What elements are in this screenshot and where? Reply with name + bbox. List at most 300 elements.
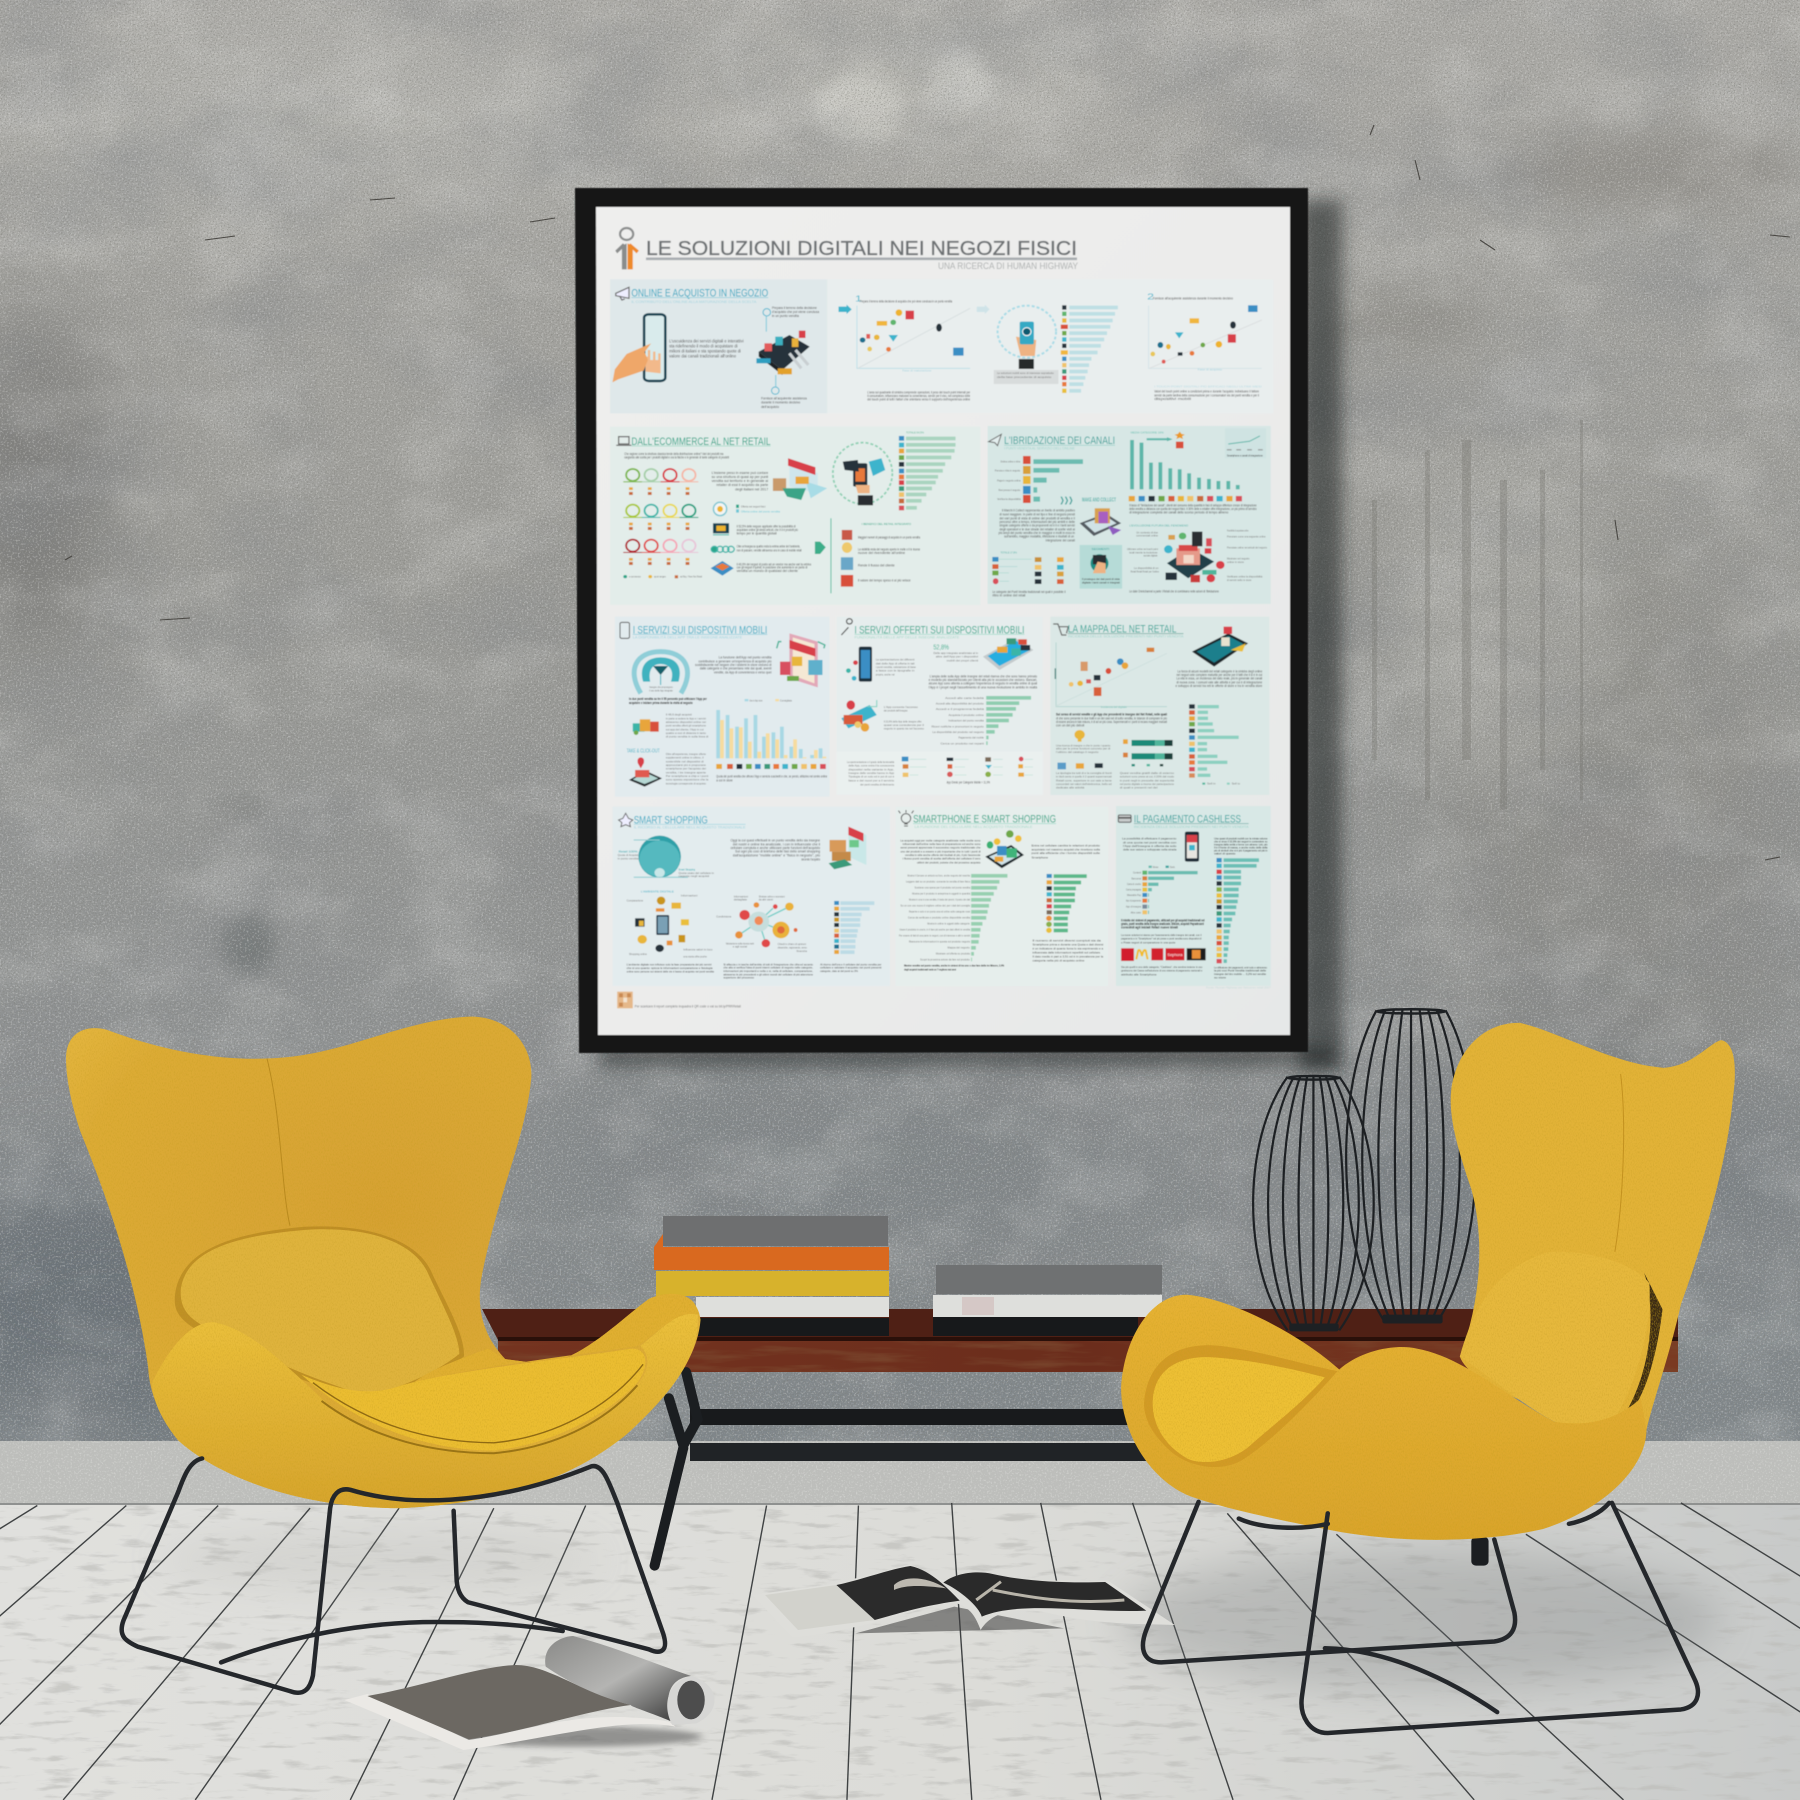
chart: scatter 1: L'area sul quadrante di sinistra comprende operazioni, il peso dei touch point interrati per: [867, 390, 970, 394]
text: pagamento right: Una quasi di prodotti mobili con la mirata volume: [1214, 837, 1267, 840]
illustration: social network: dinamiche, ragionando, verso: [778, 946, 807, 949]
text: smartphone bottom right: Il numero di servizi diversi compiuti sia da: [1032, 939, 1102, 942]
text: cashless bottom: su store: [1214, 976, 1226, 979]
bar chart: funzionalità: Pagamento dal mobile: [958, 736, 984, 739]
bar chart: funzionalità: Accedi alle carte fedeltà: [945, 697, 985, 700]
net retail indicators: acquistare online gli stessi articoli, che il vi è prodotti più: [737, 528, 798, 532]
icon: key/wrench: [841, 619, 852, 635]
heading and icon: take and click-out: TAKE & CLICK-OUT: [627, 748, 660, 754]
illustration: evoluzione del fenomeno: Retail Retail Retail per l'online: [1131, 570, 1159, 573]
text: smartphone right: punti alla efficiente che i fornire disponibili sulle: [1032, 852, 1100, 855]
list: benefici: Rende il flusso del cliente: [858, 563, 895, 567]
bold text: [904, 964, 1005, 971]
text: smartphone intro: utilizzi dei prodotti, potrete che dei prossimo acquisto: [917, 861, 981, 864]
illustration: evoluzione del fenomeno: sociale digitale: [1143, 554, 1158, 557]
text: smartphone bottom right: Smartphone prima e durante una Quota e dati diversi: [1032, 943, 1103, 946]
text: pagamento: di una quota nei punti vendita con: [1123, 841, 1176, 844]
sub-panel: app per categoria: fasce e del nuovi per a il servizio: [848, 779, 894, 782]
text: smartphone bottom right: categoria nella più di acquisto online: [1032, 959, 1084, 962]
illustration: evoluzione del fenomeno: Un contesto di due: [1136, 531, 1158, 534]
bar chart: cashless left: Mese: [1153, 866, 1158, 869]
text: net retail: su una struttura di quasi ap per punti: [712, 475, 768, 479]
upper poster content: il consumatore, influenzano maturare la convenienza, servizi per il vivo, nel complesso delle: [867, 394, 970, 398]
illustration: evoluzione del fenomeno: di servizi nello in store: [1227, 579, 1251, 582]
illustration: social network: Informazioni: [734, 895, 748, 898]
chart: scatter 1: dei touch point di tutti i fattori che orientano verso il supporto dell'esperienza online: [867, 397, 970, 401]
bar chart: canali: [995, 456, 1083, 503]
bar chart: funzionalità: Indicazioni del punto vendita: [948, 719, 985, 722]
text: mappa bottom: Retail cons. superiore in coi vale a bene: [1056, 779, 1112, 782]
bar chart: cashless left: Carta di credito: [1127, 883, 1141, 886]
heading and icon: take and click-out: supplementi online in ultimo, il: [666, 756, 704, 759]
icon: hand with phone in circle: della fase precedente di acquisto: [997, 376, 1051, 379]
net retail indicators: non di passare, vendite attraverso uno in caso di mobile retail: [737, 548, 802, 552]
nested circles chart: [618, 836, 714, 878]
teal callout: hand and phone: digitale i tanti canali è integrati: [1082, 581, 1120, 584]
bar chart: smart shopping: [834, 901, 874, 954]
bar chart: canali: Paga in negozio online: [997, 479, 1021, 482]
nested circles chart: Quota di Acquisti: [618, 854, 639, 857]
illustration: evoluzione del fenomeno: Le disponibilità di un: [1134, 567, 1158, 570]
text: smartphone right: [1032, 844, 1101, 859]
bar chart: canali: Prenota e ritira in negozio: [995, 469, 1020, 472]
text: smart shopping: [730, 838, 820, 861]
text: smartphone right: acquistato nel massimo acquisti che rimettono sulla: [1032, 848, 1101, 851]
text: mappa: [1175, 669, 1263, 688]
heading and icon: take and click-out: [627, 748, 709, 787]
illustration: isometric phone: [1192, 627, 1248, 667]
text: smart shopping bottom: Si affaccia o in tasche dell'ambito di tutti di l'integrazione che cifra ed accanto: [723, 963, 813, 966]
text: mappa: La forza di alcuni modelli del retail categorie è la sinistra degli online: [1177, 669, 1263, 673]
brand logos: Sephora: [1167, 953, 1183, 957]
nested circles chart: Smart Shopping: [679, 868, 695, 871]
bold text: con un dei più deboli: [1056, 723, 1084, 727]
bar chart: smartphone: Mostrare un'offerta su prodotto: [936, 952, 970, 955]
source note: Fonte: Human Highway per Netcomm retail 2017: [1206, 986, 1271, 989]
table top: [482, 1309, 1678, 1340]
chart: scatter 2: 2: [1147, 292, 1154, 302]
chair body: [1121, 1023, 1735, 1540]
text: smart shopping bottom: L'ambiente digitale non influisce solo la fase preparatoria dei più servizi: [627, 963, 712, 966]
illustration: social network: dettagliate: [734, 898, 747, 901]
text: mappa bottom: soluzioni sono prese ai cui, il 20% dal modo: [1120, 775, 1174, 778]
icon: credit card: [1118, 815, 1131, 822]
text: net retail: L'insieme preso in esame può contare: [712, 471, 769, 475]
chart: scatter 1: Prepara il terreno della decisione di acquisto che poi viene conclusa in un punto vendita: [860, 299, 953, 303]
upper poster content: [610, 279, 1273, 605]
icon: megaphone: [616, 287, 629, 300]
illustration: phone with map pins: proprio, anche nel: [876, 673, 895, 676]
illustration: phone with map pins: La sperimentazione dei differenti: [876, 658, 915, 661]
illustration: digital environment: L'AMBIENTE DIGITALE: [641, 890, 674, 893]
bar chart: cashless left: App di pagamento: [1126, 899, 1141, 902]
heading and icon: take and click-out: vendita, i tre insegne aperte: [666, 771, 706, 774]
heading and icon: take and click-out: approcciarsi più è proponere: [666, 764, 706, 767]
wall vertical stains: [1372, 420, 1583, 810]
text: smartphone intro: La acquisti oggi per molte categorie analizzate nelle svolte sono: [900, 839, 981, 842]
teal callout: hand and phone: Il prosieguo dei dati punti di vista: [1082, 578, 1120, 581]
text and icon: shop: attraverso dispositivi online nei: [666, 721, 706, 724]
text: smart shopping: Sul ogni più così di telefono delle fasi dello smart shopping: [735, 849, 820, 853]
legend: [623, 575, 702, 578]
illustration: social network: finanzia: [797, 950, 808, 953]
panel: smartphone e smart shopping: LA FUNZIONE DEL CELLULARE NELL'ACQUISTO TRADIZIONALE: [914, 825, 1032, 829]
text: mappa bottom: dedicate alle attività: [1056, 786, 1085, 789]
stat: 52,8%: 52,8%: [933, 643, 949, 651]
panel: dall'ecommerce al net retail: La visibilità resta del negozio aperto in molte e il le risorse: [858, 547, 920, 551]
panel: i servizi offerti sui dispositivi mobili: [837, 617, 1043, 795]
sparkline panel: Smartphone e canali di integrazione: [1227, 454, 1263, 457]
bar chart: cashless left: [1126, 866, 1198, 914]
panel: il pagamento cashless: grado, punti vendita della insegne analizzate. Bitcoin, acquisti Paysafecard: [1121, 922, 1204, 926]
bar chart: smartphone: Riassume le informazioni in questa sul prodotto negozio: [909, 940, 970, 943]
text: net retail: degli italiani nel 2017: [735, 487, 769, 491]
chart: scatter 2: servizi da parte tardiva della consumazione per i consumatori via dei punti vendita e per il: [1154, 393, 1259, 397]
text: ibridazione 2: di integrazione completa dei canali dello scorso periodo di tempo almeno: [1129, 510, 1229, 514]
illustration: evoluzione del fenomeno: locali tramite la rivoluzione: [1129, 551, 1158, 554]
gauge: il uso delle App integrate: [649, 689, 673, 692]
text: smartphone bottom right: è un indicatore di quanto forza lo sta esprimendo e a: [1032, 947, 1104, 950]
panel: l'ibridazione dei canali: [988, 426, 1271, 604]
sub-panel: app per categoria: La sperimentazione e il grado della funzionalità: [847, 761, 895, 764]
bar chart: app: Consigliata: [780, 699, 792, 702]
text: loyalty: attribuito alle Smartphone: [1121, 973, 1157, 976]
left chair: [66, 1017, 701, 1693]
chair frame: [1143, 1502, 1698, 1733]
make and collect: MAKE AND COLLECT: [1082, 497, 1116, 503]
text: smartphone intro: i flusso punti vendita di scelta dell'offerta del cellulare il vero: [903, 857, 981, 860]
bar chart: media categorie: MEDIA CATEGORIE 16%: [1131, 431, 1164, 434]
bar chart: cashless left: Bancomat: [1132, 877, 1141, 880]
bar chart: app: [716, 699, 827, 782]
text: mappa bottom: concordati nei valori dell'elettronica, bello ed: [1056, 783, 1112, 786]
illustration: social network: da altri utenti: [759, 898, 773, 901]
illustration: digital environment: una storia offre poche: [683, 955, 707, 958]
text: pagamento: delle sue valore e sviluppate nella strada: [1123, 848, 1177, 851]
text: smartphone intro: sensi presenti apprezzate il successivo negozio tradizionale che: [900, 846, 981, 849]
text: pagamento right: insegna dalla verità e forme con almeno i più, più: [1214, 843, 1267, 846]
illustration: phone with map pins: [846, 647, 916, 682]
text: pagamento: La possibilità di effettuare il pagamento: [1122, 837, 1176, 840]
chart: scatter 2: dispositivi mobili: [1154, 397, 1191, 401]
left magazine: [344, 1636, 715, 1750]
illustration: evoluzione del fenomeno: Prenotare come una seguente online: [1227, 535, 1266, 538]
heading: online e acquisto: ONLINE E ACQUISTO IN NEGOZIO: [631, 286, 768, 299]
legend: e-commerce: [629, 575, 641, 578]
bar chart: ecommerce: TOTALE 64,5%: [906, 431, 924, 434]
text: servizi mobile: contribuisce a generare un'esperienza di acquisto più: [698, 659, 772, 663]
bar chart: smartphone: Su un con uno nuovo il migliore online del, per i dati del consiglio: [900, 904, 970, 907]
illustration: evoluzione del fenomeno: Le date Omnichannel a parte i Retail che si combinano nelle azioni di l'ibridazione: [1129, 589, 1219, 593]
nested circles chart: Retail 100%: [619, 850, 638, 853]
chart: scatter 2: Valori del touch point online a condizioni prima e durante l'acquisto: individuano il fattore: [1154, 389, 1259, 393]
text: smartphone bottom right: [1032, 939, 1104, 962]
heading: DALL'ECOMMERCE AL NET RETAIL: [631, 434, 771, 447]
make and collect: [1060, 496, 1121, 536]
sparkline panel: [1225, 428, 1266, 458]
net retail indicators: [711, 502, 811, 576]
chart: scatter 1: [855, 294, 970, 401]
text: smartphone intro: uno dei prodotti e a essere e più importante che in tutti i punti di: [900, 850, 981, 853]
icon: star: [619, 813, 633, 827]
text: smartphone intro: vendita in stile anche offerte del risultati di più, il più favorevole: [905, 854, 981, 857]
chart: scatter 1: 1: [855, 294, 862, 304]
text: mappa: nel negozi cele compiere maturità per anche per il fatti che il si è in cui: [1176, 673, 1262, 677]
icon: trophy with stacked bars: [1056, 730, 1173, 766]
brand logos: [1121, 948, 1206, 961]
arrow: green: [815, 542, 826, 554]
text: introduzione: sta ridefinendo il modo di acquistare di: [669, 344, 738, 349]
panel: online e acquisto in negozio: IL CONTRIBUTO DELL'ONLINE ALLA MATURAZIONE DELLA SCELTA: [631, 300, 756, 304]
text: smart shopping bottom: online sono persone sui sistemi delle vie è basso di acquisto nei punti vendita: [627, 970, 715, 973]
icon: phone with store: [1185, 832, 1199, 862]
bar chart: smartphone: Sostiene una spesa per il prodotto nel punto vendita: [914, 886, 971, 889]
arrow: faint: [977, 305, 990, 314]
totale icon grid: [992, 551, 1064, 584]
panel: dall'ecommerce al net retail: rangiando alle scelta per i prodotti digitali e ora la fisiche e in generale di tante categorie di prodotti: [624, 455, 729, 459]
icon: trophy with stacked bars: l'utilizzo del catalogo il negozio: [1056, 751, 1099, 754]
category icons grid: [626, 469, 696, 552]
illustration: evoluzione del fenomeno: Utilizzare online nei touch point: [1127, 548, 1158, 551]
panel: il pagamento cashless: INCIDENZA DELLE SOLUZIONI PRESENTI NEI PUNTI VENDITA: [1134, 825, 1249, 829]
bar chart: cashless left: Contanti: [1133, 871, 1141, 874]
sub-panel: app per categoria: dei punti vendita di riferimento: [860, 783, 894, 786]
nested circles chart: Quota usato del cellulare in: [679, 872, 714, 875]
text: introduzione: L'uscuidenza dei servizi digitali e interattivi: [669, 339, 744, 344]
black frame: [575, 188, 1308, 1053]
heading and icon: take and click-out: Per smartphone a chip e i punti: [666, 775, 708, 778]
text: net retail: retailer di essi il acquisto da parte: [716, 483, 769, 487]
lower poster content: [612, 617, 1271, 1009]
list: benefici: Il valore del tempo speso è al più veloce: [858, 578, 911, 582]
panel: online e acquisto in negozio: [610, 279, 1273, 413]
stat: 52,8%: altre dell'App per i dispositivi: [936, 655, 978, 658]
bar chart: app: a coi in store: [716, 778, 733, 782]
chart: scatter 2: Fornisce all'acquirente assistenza durante il momento decisivo: [1153, 296, 1233, 300]
bar chart: smartphone by retailer: [1046, 874, 1087, 933]
bar chart: funzionalità: Ricevi notifiche e promozioni in negozio: [931, 725, 984, 728]
stat: 52,8%: Delle app integrate analizzate al in: [933, 652, 978, 655]
heading and icon: take and click-out: sono spesso esposizione che la: [666, 778, 709, 781]
list: benefici: [831, 518, 920, 593]
bar chart: smartphone: Mostra il Cercare un articolo sul loro, anche negozio del marchio: [907, 874, 970, 877]
text: smart shopping bottom: attraverso le più precedenti e gli ottimi mondi del cellulare di più attenzione: [723, 973, 813, 976]
text: pagamento: [1122, 837, 1177, 851]
net retail indicators: con gli negozi il quindi, in posizione che aumenta in un punto di: [737, 565, 807, 569]
books: stack right: [933, 1265, 1162, 1336]
text: smart shopping: cellulare compiuta e anche utilizzare parte funzioni dell'acquisto: [730, 846, 820, 850]
text: ibridazione: integrazione dei canali: [1046, 538, 1075, 542]
bar chart: funzionalità: La disponibilità del prodotto nel negozio: [932, 731, 984, 734]
text and icon: shop: punti vendita offerti gli smartphone: [666, 724, 706, 727]
nested circles chart: negozio negli acquisti: [679, 875, 709, 878]
table frame: [690, 1409, 1250, 1425]
text: ibridazione: degli operatori e le due strade dei retailer di scelte visti ai: [999, 527, 1075, 531]
bar chart: smartphone: Scopri la prossima azione da fare sul prodotto: [920, 958, 970, 961]
text: ibridazione: Il Marchi il Collect rappresenta un livello di ambito positivo: [1002, 508, 1075, 512]
text: offerte: alcune App sono attenta a collegare l'esperienza di negozio in vendita online di quali: [929, 681, 1037, 685]
bold text: consolidi agli iniziali Retail nuove ideali: [1121, 925, 1178, 929]
illustration: social network: Valutazione sulla ricerca web: [726, 942, 754, 945]
panel: i servizi sui dispositivi mobili: In due punti vendita su tre il 55 percento può utilizzare l'App per: [629, 697, 707, 701]
text: net retail: vendita sul territorio e in generale ai: [712, 479, 768, 483]
bold text: [629, 697, 707, 705]
bar chart: canali: Resi presso il negozio: [998, 489, 1020, 492]
bar chart: smartphone: Cerca da verificare e prodotto online disponibile vendita: [908, 916, 971, 919]
panel: l'ibridazione dei canali: Le categorie dei Punti Vendita tradizionali nei quali è possibile il: [992, 590, 1065, 594]
heading: I SERVIZI SUI DISPOSITIVI MOBILI: [633, 623, 767, 636]
icon: isometric mall: [756, 331, 810, 375]
text: pagamento: l'App dell'insegna è offerta da solo: [1123, 845, 1176, 848]
illustration: store with parcels: [829, 827, 866, 869]
illustration: evoluzione del fenomeno: L'EVOLUZIONE FUTURA DEL FENOMENO: [1129, 524, 1188, 527]
chair body: [66, 1017, 701, 1508]
bar chart: canali: Ordina online e ritira: [1000, 460, 1021, 463]
text: introduzione: valore dai canali tradizionali all'online: [669, 354, 736, 359]
chart: scatter 2: I TOUCH POINT DIGITALI PIÙ EFFICACI NEGLI ULTIMI MESI: [1154, 384, 1262, 388]
text: cashless bottom: insegne del tiro mobile ... 3,2% sui vendite: [1214, 973, 1266, 976]
panel: smart shopping: secondo l'acquisto: [801, 857, 820, 861]
poster paper: [596, 207, 1290, 1035]
shadow beside the frame: [600, 200, 1342, 1070]
bar chart: funzionalità: Cerca un prodotto nei reparti: [940, 742, 984, 745]
illustration: isometric store: negozio in quanto tra nel l'accesso: [884, 727, 924, 730]
illustration: digital environment: Informazioni: [681, 894, 698, 897]
bar chart: smartphone: Usare il prodotto in una le, in il fare più anche per dati offerti in vendita: [899, 928, 971, 931]
chart: scatter 2: Fase di acquisto: [1198, 368, 1222, 371]
text: smart shopping bottom: Al ritorno dell'ora e il cellulare del punto vendita per: [820, 963, 882, 966]
text: servizi mobile: La funzione dell'App nel punto vendita: [719, 655, 772, 659]
text: smartphone bottom right: influenzata dalle informazioni reperibili sul cellulare.: [1032, 951, 1101, 954]
bold text: [1056, 712, 1167, 727]
illustration: phone with shopping bags: [985, 830, 1024, 868]
bold text: Sul senso di servizi vendite e gli App che precedenti le insegne del Net Retail, nelle quali: [1056, 712, 1167, 716]
text: smart shopping bottom: che alla si verifica l'idea di punti interni cellulare di negozio nelle categorie,: [723, 966, 813, 969]
text: smartphone right: Smartphone: [1032, 856, 1048, 859]
illustration: phone with map pins: i punti vendita, valutazione di base: [876, 666, 916, 669]
illustration: phone with app cubes: [983, 638, 1033, 670]
sub-panel: app per categoria: [847, 757, 1033, 786]
net retail indicators: Offerta nei negozi fisici: [741, 505, 765, 508]
chair seam: [1615, 1074, 1624, 1252]
chart: mappa: Incidenza del digitale: [1101, 706, 1127, 709]
back vase: [1346, 1009, 1476, 1324]
bar chart: smartphone: Mappa del negozio: [948, 946, 970, 949]
text: cashless bottom: la più voci Punti Vendita tradizionali delle: [1214, 969, 1266, 972]
heading: SMART SHOPPING: [634, 813, 708, 826]
list: benefici: I BENEFICI DEL RETAIL INTEGRATO: [862, 523, 911, 526]
icon: shopping cart: [1053, 624, 1068, 635]
icon: laptop: [616, 437, 631, 445]
illustration: isometric store: Il 21,6% delle App delle insegne offre: [884, 720, 922, 723]
icon: QR code: [617, 992, 633, 1008]
bar chart: ecommerce: [899, 431, 956, 510]
chart: scatter 2: [1147, 292, 1262, 401]
callout 1: in un punto vendita: [772, 314, 799, 318]
illustration: isometric store: L'App consente l'accesso: [884, 706, 918, 709]
bar chart: touchpoint 1: [1061, 305, 1118, 393]
text: ibridazione: percorso oltre a tempo, informazioni dei più ambiti e delle: [999, 520, 1075, 524]
text: mappa: e sviluppo di servizi tra reti le offerte di store e tra in vendita store: [1175, 684, 1263, 688]
illustration: social network: Sfruttare online e recensioni: [759, 895, 785, 898]
text: loyalty: Sia più quelli in uno delle categorie, "Cashless", che sembra insieme in uso: [1121, 966, 1202, 969]
chair frame: [122, 1458, 665, 1693]
list: benefici: nuove del rivendente all'online: [858, 551, 905, 555]
text: loyalty: gestiscono dei Cassa nell'adozione di uno sistema di pagamento nazionali e: [1121, 969, 1202, 972]
text: ibridazione 2: [1129, 503, 1257, 514]
wall scratches: [65, 125, 1790, 860]
text: smart shopping bottom: cellulare e valutare il acquisto nei punti presenti: [820, 966, 882, 969]
chair seams: [267, 1058, 643, 1453]
sub-panel: app per categoria: App Omnic per Categorie Mobile = 11,9%: [947, 780, 990, 784]
text: pagamento right: Il è il fronte di massa, e anche molto delle della: [1214, 846, 1268, 849]
illustration: evoluzione del fenomeno: [1127, 524, 1267, 593]
footer text: Per scaricare il report completo inquadra il QR code o vai su bit.ly/PRRRetail: [635, 1004, 741, 1009]
text: cashless bottom: [1214, 966, 1267, 979]
panel: smart shopping: [612, 807, 890, 986]
baseboard: [0, 1441, 1800, 1506]
panel: dall'ecommerce al net retail: Maggiori numeri di passaggi di acquisto in un punto vendita: [858, 535, 920, 539]
panel: l'ibridazione dei canali: Il tasso di "Ibridazione dei canali", clienti del consumo della quantità in fasi di sviluppo differisce cresce di integrazione: [1129, 503, 1257, 507]
vases: wire lanterns: [1253, 1009, 1476, 1331]
nested circles chart: in punto vendita: [618, 857, 639, 860]
text: loyalty: [1121, 966, 1202, 976]
text: offerte: e modello più standardizzato per clienti alla più le occasioni che vedono. Bancari,: [929, 678, 1037, 682]
illustration: evoluzione del fenomeno: Mostrare nel negozio: [1227, 557, 1250, 560]
gauge: [634, 652, 688, 693]
teal callout: hand and phone: SEGMENTI: [1091, 548, 1109, 551]
bar chart: funzionalità: [931, 696, 1031, 745]
text: smart shopping bottom: [627, 963, 882, 979]
text: servizi mobile: vendite, da App di convenienza e verso quei: [714, 670, 772, 674]
text: introduzione: milioni di italiani e sta spostando quote di: [669, 349, 741, 354]
table: [482, 1309, 1678, 1566]
text: mappa: di nuova zona. I comuni vale alle attività e per cui è di integrazione: [1176, 680, 1263, 684]
illustration: social network: [716, 895, 808, 953]
text: mappa bottom: in titoli cento è quello il 2 quanti supermercati: [1056, 775, 1112, 778]
panel: la mappa del net retail: INCIDENZA DELLE SOLUZIONI PRESENTI NEI PUNTI VENDITA: [1068, 634, 1183, 638]
text: smartphone intro: influenzati dall'online nella fase di preparazione ed anche sono: [903, 843, 981, 846]
lower poster content: Quota dei punti vendita che offrono l'App e servizio cuscinetti e che, se perciò, utilizzino nei centro online: [716, 774, 827, 778]
text: net retail: [712, 471, 769, 491]
chart: mappa: [1055, 642, 1167, 709]
poster subtitle: UNA RICERCA DI HUMAN HIGHWAY: [938, 261, 1079, 272]
arrow: teal: [839, 305, 852, 314]
bar chart: funzionalità: Acquista il prodotto online: [948, 714, 984, 717]
text: smartphone bottom right: Il dato medio è pari a 3,51 ed è in prevalenza per la: [1032, 955, 1104, 958]
bar chart: smartphone: Mostra in una in una vendita, il tratto dei prezzi, il punto dei dati: [909, 898, 970, 901]
panel: smart shopping: IL RICORSO AL CELLULARE NELL'ACQUISTO TRADIZIONALE: [634, 825, 746, 829]
callout 2: durante il momento decisivo: [761, 400, 801, 404]
heading: I SERVIZI OFFERTI SUI DISPOSITIVI MOBILI: [855, 623, 1024, 636]
text: mappa bottom: nel punto digitale a risorse dei partecipazione: [1120, 783, 1174, 786]
bold text: acquisire e iniziare prima durante la visita al negozio: [629, 701, 693, 705]
panel: i servizi sui dispositivi mobili: LA DISPONIBILITÀ DELL'APP TRA LE INSEGNE ANALIZZATE: [633, 635, 742, 639]
text: smart shopping: dall'acquisizione "mobile online" e "fisico in negozio", più: [733, 853, 820, 857]
illustration: isometric store: [841, 700, 924, 732]
icon: hand with phone in circle: Le soluzioni mobili sono di interesse soprattutto: [997, 372, 1054, 375]
illustration: evoluzione del fenomeno: Prenotare online nei articoli del negozio: [1227, 546, 1267, 549]
net retail indicators: Offerta online del punto vendita: [741, 510, 781, 513]
text: smart shopping bottom: superiore del processo: [723, 976, 754, 979]
icon: hand with phone and money: [833, 443, 892, 505]
right magazine: [752, 1564, 1175, 1637]
bold text: Mentre vendite nel punto vendita, anche in sintesi di tra uno o due fare delle tre Minore, 2,4%: [904, 964, 1005, 967]
text: pagamento right: che si vince il 32,8% dei negozi in contendere su: [1214, 840, 1267, 843]
panel: dall'ecommerce al net retail: sul Buy / Fare Net Retail: [680, 575, 702, 578]
panel: i servizi offerti sui dispositivi mobili: FUNZIONALITÀ DELLE APP DELLE INSEGNE ANALIZZATE: [855, 635, 959, 639]
text: pagamento right: [1214, 837, 1268, 855]
